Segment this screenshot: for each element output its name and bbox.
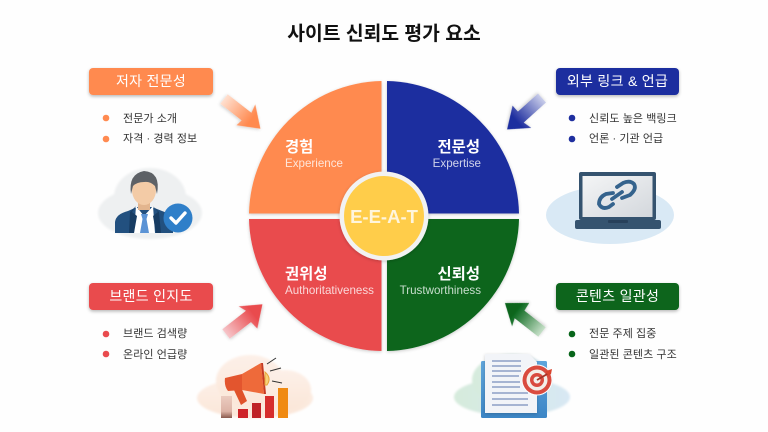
heading pill bbox=[556, 68, 679, 95]
center badge: E-E-A-T: E-E-A-T bbox=[350, 206, 419, 227]
heading pill: 저자 전문성 bbox=[116, 73, 186, 89]
bullet list: 일관된 콘텐츠 구조 bbox=[589, 347, 677, 361]
arrow: brand awareness to authoritativeness bbox=[217, 294, 272, 346]
arrow: author expertise to experience bbox=[216, 87, 270, 138]
bullet list: 전문가 소개 bbox=[123, 112, 177, 125]
arrow: content consistency to trustworthiness bbox=[496, 291, 551, 343]
quadrant: authoritativeness: Authoritativeness bbox=[285, 284, 374, 297]
panel: external links and mentions bbox=[546, 68, 679, 244]
icon: laptop with chain link bbox=[546, 172, 674, 244]
bullet list: 온라인 언급량 bbox=[123, 348, 187, 361]
bullet list bbox=[569, 327, 677, 361]
icon: document with target bbox=[454, 354, 570, 418]
heading pill: 외부 링크 & 언급 bbox=[567, 73, 668, 89]
E-E-A-T circle diagram bbox=[249, 81, 519, 351]
quadrant: trustworthiness: 신뢰성 bbox=[438, 265, 480, 283]
panel: brand awareness bbox=[89, 283, 313, 418]
bullet list: 언론 · 기관 언급 bbox=[589, 132, 663, 145]
heading pill: 콘텐츠 일관성 bbox=[576, 288, 659, 304]
quadrant: expertise: 전문성 bbox=[438, 138, 480, 156]
center badge: E-E-A-T bbox=[340, 172, 428, 260]
bullet list: 전문 주제 집중 bbox=[589, 327, 656, 340]
bullet list: 브랜드 검색량 bbox=[123, 327, 187, 340]
quadrant: trustworthiness: Trustworthiness bbox=[400, 284, 481, 297]
heading pill bbox=[556, 283, 679, 310]
bullet list: 자격 · 경력 정보 bbox=[123, 132, 197, 145]
icon: businessman with check badge bbox=[98, 168, 202, 239]
title: 사이트 신뢰도 평가 요소 bbox=[287, 23, 481, 45]
quadrant: experience: Experience bbox=[285, 157, 343, 170]
panel: content consistency bbox=[454, 283, 679, 418]
quadrant: authoritativeness bbox=[249, 219, 382, 351]
quadrant: expertise: Expertise bbox=[433, 157, 481, 170]
quadrant: expertise bbox=[387, 81, 519, 214]
icon: megaphone and bar chart bbox=[197, 355, 313, 418]
quadrant: experience: 경험 bbox=[285, 138, 313, 156]
bullet list: 신뢰도 높은 백링크 bbox=[589, 112, 677, 125]
quadrant: experience bbox=[249, 81, 382, 214]
bullet list bbox=[103, 327, 187, 361]
arrow: external links to expertise bbox=[498, 88, 552, 141]
heading pill bbox=[89, 68, 213, 95]
panel: author expertise bbox=[89, 68, 213, 239]
heading pill bbox=[89, 283, 213, 310]
quadrant: trustworthiness bbox=[387, 219, 519, 351]
bullet list bbox=[569, 112, 677, 145]
heading pill: 브랜드 인지도 bbox=[109, 288, 193, 304]
bullet list bbox=[103, 112, 197, 145]
quadrant: authoritativeness: 권위성 bbox=[285, 265, 327, 283]
